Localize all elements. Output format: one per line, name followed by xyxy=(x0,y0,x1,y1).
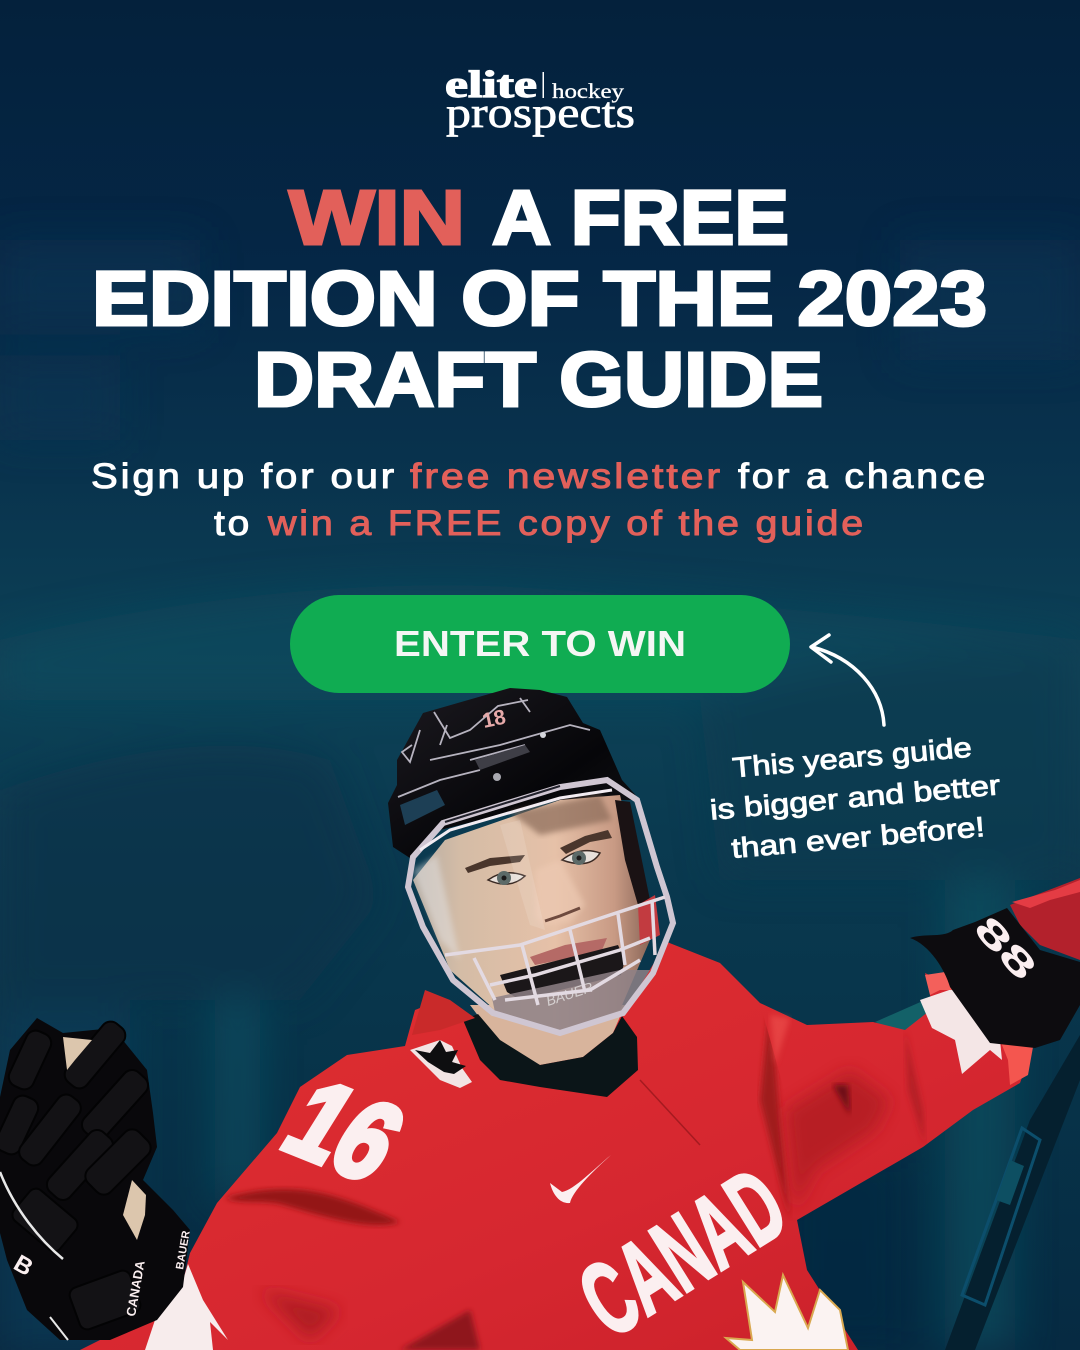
logo: elite hockey prospects: prospects xyxy=(446,90,635,137)
logo: elite hockey prospects xyxy=(445,64,635,137)
red collar flap xyxy=(412,990,475,1035)
helmet number: 18 xyxy=(480,705,508,733)
player: B xyxy=(9,1250,38,1282)
button: enter to win: ENTER TO WIN xyxy=(394,623,686,664)
jersey xyxy=(80,942,1033,1350)
jersey seam xyxy=(640,1080,700,1145)
cuff right xyxy=(925,972,960,995)
nose xyxy=(535,860,585,925)
eyes xyxy=(488,851,600,885)
glove skin xyxy=(63,1037,92,1070)
arrow xyxy=(811,635,884,725)
right arm undershirt xyxy=(875,1000,945,1035)
neck xyxy=(470,1005,625,1065)
nike swoosh xyxy=(550,1155,611,1203)
visor sheen xyxy=(413,855,460,960)
chin guard text: BAUER xyxy=(544,979,595,1009)
chin guard xyxy=(492,970,650,1033)
right glove red top xyxy=(1010,878,1080,960)
hair shadow xyxy=(615,800,650,905)
button: enter to win xyxy=(290,595,790,693)
title: WIN xyxy=(289,175,465,261)
subtitle: free newsletter xyxy=(410,457,723,496)
glove cuff text: CANADA xyxy=(123,1259,148,1318)
title: EDITION OF THE 2023 xyxy=(92,256,987,342)
sleeve maple leaf left xyxy=(145,1264,228,1350)
callout text: is bigger and better xyxy=(709,769,1001,826)
mouth guard dark xyxy=(500,945,625,1000)
collar xyxy=(463,1014,638,1097)
helmet reflections xyxy=(400,790,445,825)
logo: elite hockey prospects: elite xyxy=(445,64,537,106)
title xyxy=(92,175,987,423)
arm folds xyxy=(785,1070,890,1210)
number 16: 16 xyxy=(264,1058,425,1205)
subtitle: for a chance xyxy=(738,457,988,496)
lips xyxy=(530,938,607,965)
hockey stick xyxy=(945,1035,1080,1350)
title: DRAFT GUIDE xyxy=(254,337,823,423)
jersey folds xyxy=(225,1000,790,1350)
helmet shell xyxy=(388,688,640,860)
left glove xyxy=(0,1018,190,1340)
sleeve maple leaf right xyxy=(920,987,1002,1074)
subtitle: to xyxy=(214,504,252,543)
subtitle xyxy=(91,457,988,543)
title: A FREE xyxy=(492,175,789,261)
logo: elite hockey prospects: hockey xyxy=(552,79,625,103)
face xyxy=(413,795,650,1030)
right glove xyxy=(910,908,1080,1048)
chest maple leaf xyxy=(726,1275,848,1350)
visor rim xyxy=(408,780,673,1033)
player xyxy=(0,688,1080,1350)
callout text: This years guide xyxy=(731,732,973,783)
subtitle: win a FREE copy of the guide xyxy=(267,504,866,543)
callout text xyxy=(709,732,1001,864)
helmet highlights xyxy=(398,698,590,797)
subtitle: Sign up for our xyxy=(91,457,397,496)
callout text: than ever before! xyxy=(730,811,986,864)
glove number: 88 xyxy=(966,907,1045,988)
eyebrows xyxy=(465,855,525,873)
glove white piping xyxy=(0,1172,63,1259)
glove fingers xyxy=(0,1018,155,1332)
cage bars xyxy=(445,897,665,1005)
chest logo xyxy=(410,1040,472,1088)
player: BAUER xyxy=(174,1230,193,1271)
